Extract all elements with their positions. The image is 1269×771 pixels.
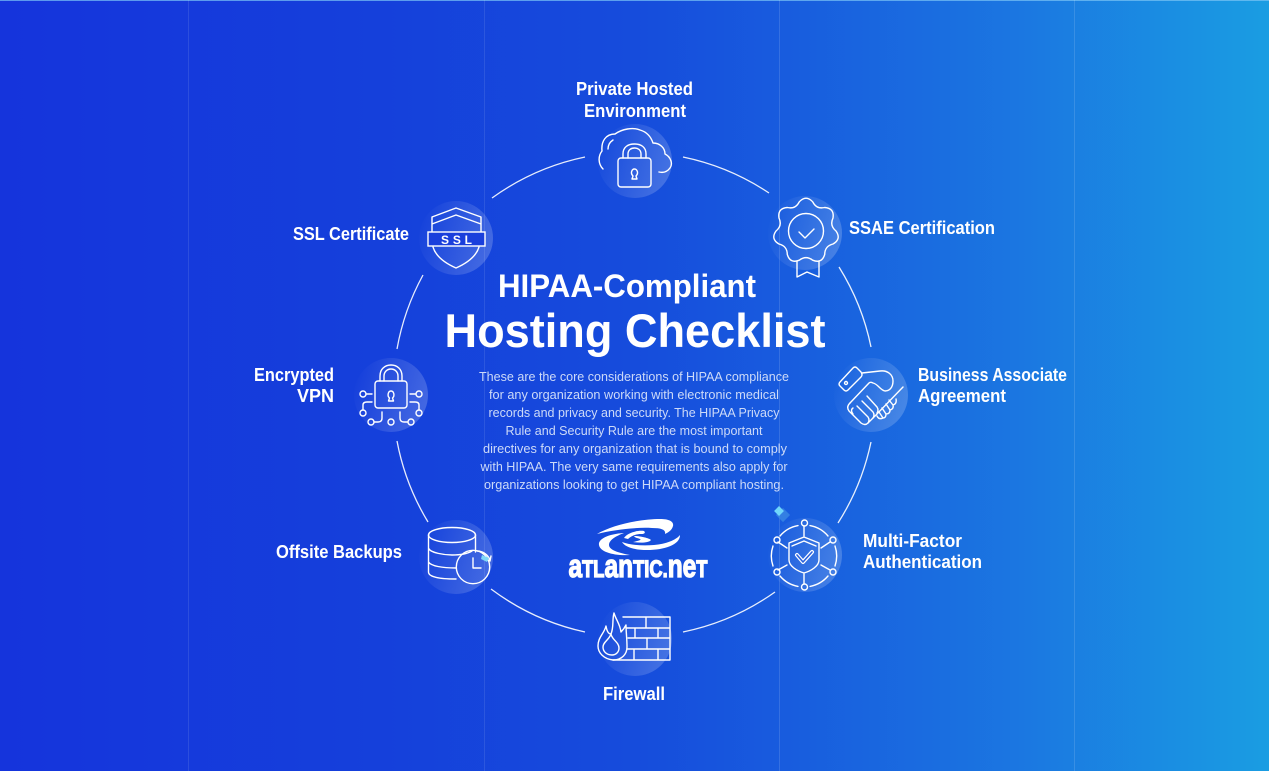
label: encrypted vpn	[254, 365, 334, 406]
logo: atlantic.net	[568, 519, 708, 584]
icon: ssl shield: SSL	[441, 233, 472, 247]
ring of connecting arcs	[397, 157, 871, 632]
item: ssl certificate	[293, 201, 493, 275]
label: business associate agreement: Agreement	[918, 386, 1006, 406]
icon: handshake	[834, 358, 908, 432]
label: private hosted environment: Private Hosted	[576, 79, 693, 99]
label: multi-factor authentication: Multi-Factor	[863, 531, 962, 551]
label: private hosted environment: Environment	[584, 101, 686, 121]
description text: Rule and Security Rule are the most important	[506, 424, 763, 438]
heading: HIPAA-Compliant	[498, 268, 756, 304]
icon: firewall	[598, 602, 672, 676]
icon: ssl shield	[419, 201, 493, 275]
logo: atlantic.net: aTLanTIC.neT	[568, 548, 708, 584]
label: encrypted vpn: Encrypted	[254, 365, 334, 385]
description text: directives for any organization that is bound to comply	[483, 442, 788, 456]
label: ssl certificate: SSL Certificate	[293, 224, 409, 244]
label: firewall: Firewall	[603, 684, 665, 704]
icon: shield network	[768, 518, 842, 592]
label: multi-factor authentication: Authentication	[863, 552, 982, 572]
description text: for any organization working with electronic medical	[489, 388, 779, 402]
label: offsite backups: Offsite Backups	[276, 542, 402, 562]
label: multi-factor authentication	[863, 531, 982, 572]
heading	[444, 268, 826, 357]
decorative diamond marker	[774, 506, 790, 522]
icon: cloud lock	[598, 124, 672, 198]
description text	[479, 370, 789, 492]
item: encrypted vpn	[254, 358, 428, 432]
label: encrypted vpn: VPN	[297, 386, 334, 406]
label: ssae certification: SSAE Certification	[849, 218, 995, 238]
item: multi-factor authentication	[768, 506, 982, 592]
description text: These are the core considerations of HIPAA compliance	[479, 370, 789, 384]
icon: certification badge	[768, 196, 842, 277]
icon: circuit lock	[354, 358, 428, 432]
item: business associate agreement	[834, 358, 1067, 432]
item: firewall	[598, 602, 672, 704]
description text: records and privacy and security. The HIPAA Privacy	[488, 406, 780, 420]
item: ssae certification	[768, 196, 995, 277]
heading: Hosting Checklist	[444, 304, 826, 357]
label: business associate agreement	[918, 365, 1067, 406]
description text: organizations looking to get HIPAA compliant hosting.	[484, 478, 784, 492]
description text: with HIPAA. The very same requirements also apply for	[479, 460, 788, 474]
icon: database with clock	[419, 520, 493, 594]
label: private hosted environment	[576, 79, 693, 121]
item: offsite backups	[276, 520, 493, 594]
label: business associate agreement: Business Associate	[918, 365, 1067, 385]
item: private hosted environment	[576, 79, 693, 198]
